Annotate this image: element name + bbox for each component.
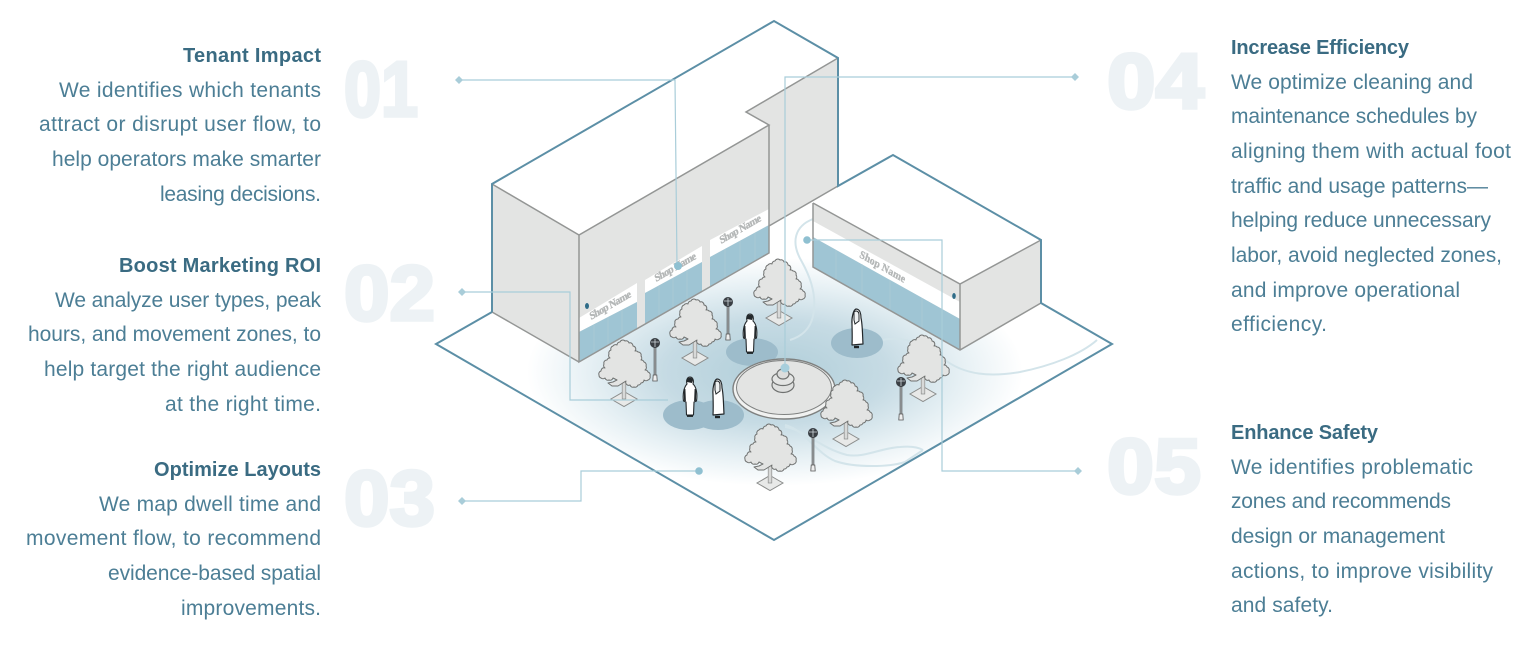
- security marker: [585, 303, 589, 309]
- right face: [960, 240, 1041, 350]
- roof: [813, 155, 1041, 284]
- sign text: Shop Name: [858, 249, 907, 286]
- text block: Optimize Layouts: We map dwell time and: [99, 493, 321, 516]
- text block: Optimize Layouts: evidence-based spatial: [108, 562, 321, 585]
- text block: Enhance Safety: design or management: [1231, 525, 1445, 548]
- shop 3: Shop Name: [719, 213, 763, 247]
- fountain: [733, 359, 835, 419]
- number 01: 01: [344, 45, 418, 133]
- building: long shop block: [492, 21, 838, 362]
- front fascia: [813, 203, 960, 350]
- text block: Optimize Layouts: [26, 459, 321, 620]
- front face: [579, 125, 769, 362]
- number 05: 05: [1107, 422, 1201, 510]
- plaza glow: [547, 268, 1002, 476]
- text block: Optimize Layouts: movement flow, to recommend: [26, 527, 321, 550]
- text block: Tenant Impact: We identifies which tenants: [59, 79, 321, 102]
- shop 1: Shop Name: [589, 289, 633, 323]
- text block: Increase Efficiency: efficiency.: [1231, 313, 1327, 336]
- trees: [599, 259, 949, 490]
- shop 1: [579, 283, 637, 362]
- text block: Tenant Impact: Tenant Impact: [183, 45, 321, 67]
- text block: Enhance Safety: We identifies problematic: [1231, 456, 1473, 479]
- text block: Enhance Safety: [1231, 422, 1494, 617]
- shop 2: Shop Name: [654, 251, 698, 285]
- text block: Enhance Safety: actions, to improve visibility: [1231, 560, 1494, 583]
- text block: Tenant Impact: [39, 45, 321, 206]
- shop 3: [710, 209, 769, 287]
- text block: Increase Efficiency: [1231, 37, 1511, 336]
- walking paths: [785, 219, 1097, 466]
- text block: Enhance Safety: Enhance Safety: [1231, 422, 1379, 444]
- text block: Increase Efficiency: traffic and usage patterns—: [1231, 175, 1488, 198]
- shop 2: [645, 246, 702, 324]
- text block: Enhance Safety: and safety.: [1231, 594, 1333, 617]
- text block: Boost Marketing ROI: We analyze user types, peak: [55, 289, 322, 312]
- glazing band: [813, 237, 960, 350]
- text block: Boost Marketing ROI: [28, 255, 322, 416]
- text block: Boost Marketing ROI: hours, and movement zones, to: [28, 323, 321, 346]
- leader line 04: [785, 73, 1079, 368]
- text block: Increase Efficiency: maintenance schedules by: [1231, 105, 1478, 128]
- block edges: [492, 58, 838, 362]
- number 03: 03: [344, 454, 435, 542]
- text block: Increase Efficiency: and improve operational: [1231, 279, 1460, 302]
- text block: Boost Marketing ROI: help target the right audience: [44, 358, 321, 381]
- people shadows: [663, 328, 883, 430]
- number 04: 04: [1107, 37, 1204, 125]
- text block: Tenant Impact: help operators make smarter: [52, 148, 321, 171]
- text block: Boost Marketing ROI: Boost Marketing ROI: [119, 255, 321, 277]
- sign band: [813, 221, 960, 319]
- text block: Boost Marketing ROI: at the right time.: [165, 393, 321, 416]
- ground plaza: [547, 268, 1002, 476]
- text block: Optimize Layouts: improvements.: [181, 597, 321, 620]
- text block: Increase Efficiency: We optimize cleaning and: [1231, 71, 1473, 94]
- leader line 05: [803, 236, 1082, 475]
- text block: Tenant Impact: leasing decisions.: [160, 183, 321, 206]
- number 02: 02: [344, 249, 435, 337]
- leader line 01: [455, 76, 682, 270]
- building: corner shop block: [813, 155, 1041, 350]
- upper rear face: [746, 58, 838, 226]
- lamp posts: [650, 297, 906, 471]
- plaza outline: [436, 21, 1112, 540]
- text block: Tenant Impact: attract or disrupt user flow, to: [39, 113, 321, 136]
- block edges: [813, 203, 1041, 350]
- left face: [492, 184, 579, 362]
- text block: Increase Efficiency: aligning them with actual foot: [1231, 140, 1511, 163]
- leader line 02: [458, 288, 668, 400]
- roof: [492, 21, 838, 235]
- text block: Increase Efficiency: labor, avoid neglected zones,: [1231, 244, 1502, 267]
- text block: Enhance Safety: zones and recommends: [1231, 490, 1451, 513]
- people: [683, 309, 863, 417]
- text block: Optimize Layouts: Optimize Layouts: [154, 459, 321, 481]
- text block: Increase Efficiency: helping reduce unnecessary: [1231, 209, 1492, 232]
- leader line 03: [458, 467, 703, 505]
- text block: Increase Efficiency: Increase Efficiency: [1231, 37, 1410, 59]
- security marker: [952, 293, 956, 299]
